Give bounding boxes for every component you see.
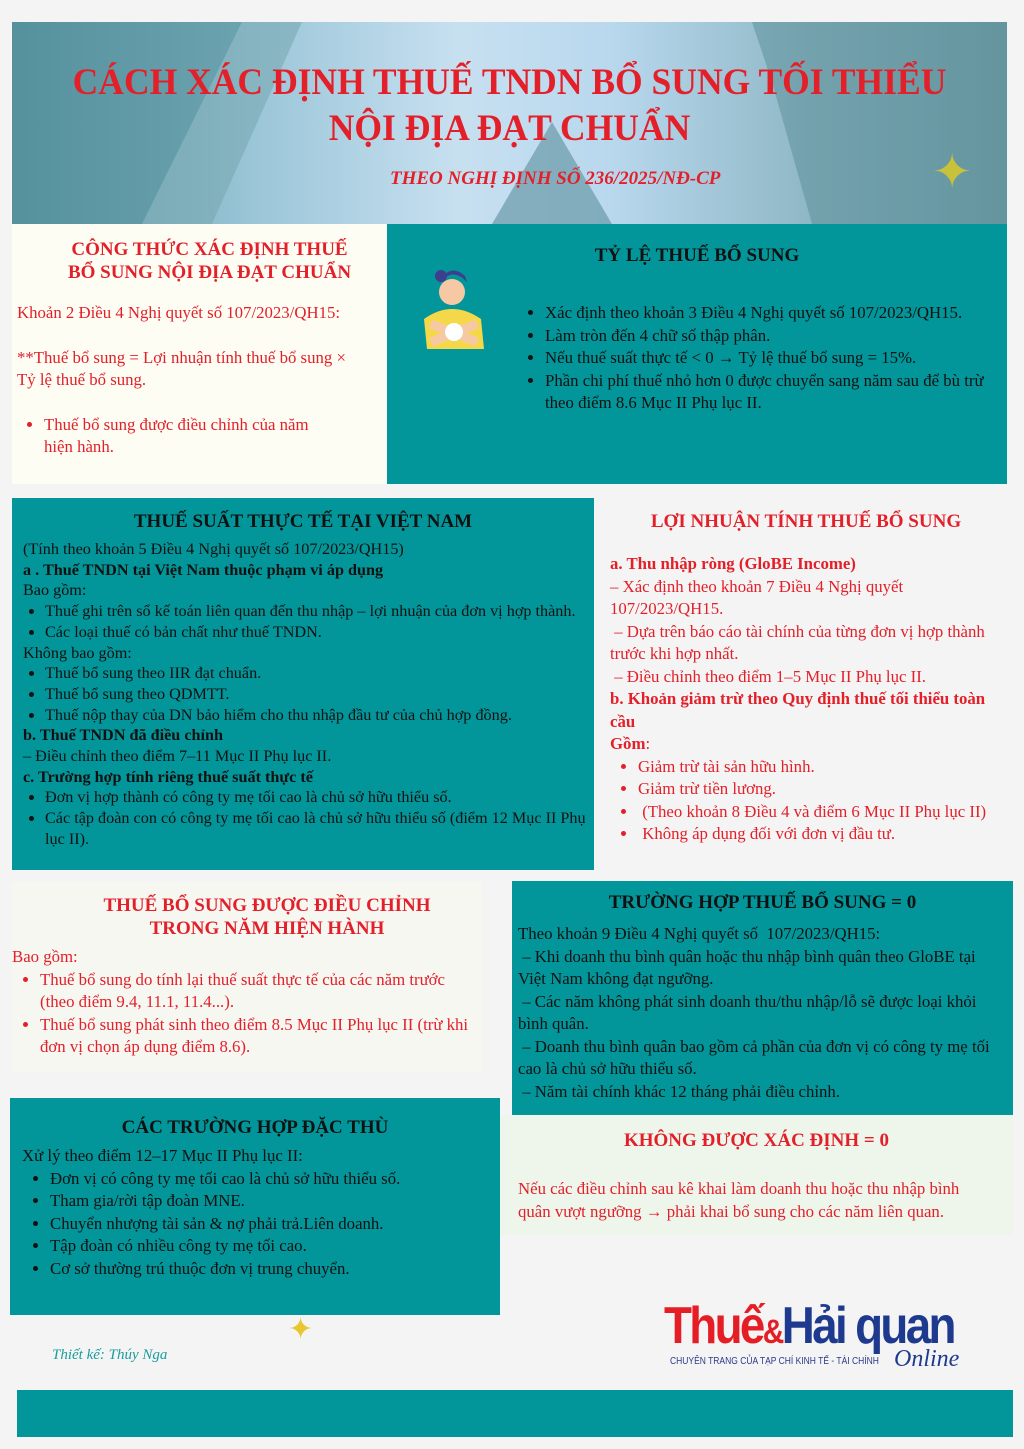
panel: not zero: Nếu các điều chỉnh sau kê khai làm doanh thu hoặc thu nhập bình quân vượt ngưỡng → phải khai bổ sung cho các năm liên quan.	[518, 1179, 959, 1220]
panel: adjusted tax: THUẾ BỔ SUNG ĐƯỢC ĐIỀU CHỈNH	[103, 895, 431, 916]
panel: profit: b. Khoản giảm trừ theo Quy định thuế tối thiểu toàn cầu	[610, 689, 985, 730]
panel: profit: (Theo khoản 8 Điều 4 và điểm 6 Mục II Phụ lục II)	[642, 802, 986, 820]
panel: adjusted tax	[12, 882, 482, 1072]
header banner	[12, 22, 1007, 224]
panel: effective rate: Đơn vị hợp thành có công ty mẹ tối cao là chủ sở hữu thiểu số.	[45, 788, 452, 806]
title: NỘI ĐỊA ĐẠT CHUẨN	[329, 108, 690, 149]
panel: zero case	[512, 881, 1013, 1115]
panel: not zero	[500, 1115, 1013, 1235]
panel: zero case: – Các năm không phát sinh doanh thu/thu nhập/lỗ sẽ được loại khỏi bình quân.	[518, 992, 976, 1033]
panel: profit: – Xác định theo khoản 7 Điều 4 Nghị quyết 107/2023/QH15.	[610, 576, 903, 618]
panel: effective rate: Các loại thuế có bản chất như thuế TNDN.	[45, 623, 322, 641]
panel: formula	[12, 224, 387, 484]
logo: CHUYÊN TRANG CỦA TẠP CHÍ KINH TẾ - TÀI CHÍNH	[670, 1356, 879, 1367]
panel: special cases: Xử lý theo điểm 12–17 Mục II Phụ lục II:	[22, 1146, 303, 1165]
panel: special cases	[10, 1098, 500, 1315]
panel: tax rate	[387, 224, 1007, 484]
icon: person	[424, 270, 484, 349]
panel: formula: **Thuế bổ sung = Lợi nhuận tính thuế bổ sung × Tỷ lệ thuế bổ sung.	[17, 348, 346, 389]
panel: adjusted tax: TRONG NĂM HIỆN HÀNH	[150, 918, 384, 939]
panel: tax rate: Làm tròn đến 4 chữ số thập phân.	[545, 326, 770, 344]
title	[73, 60, 946, 149]
panel: profit: Gồm:	[610, 734, 650, 753]
panel: effective rate: Bao gồm:	[23, 581, 86, 599]
panel: profit	[610, 510, 986, 843]
panel: special cases: Tham gia/rời tập đoàn MNE.	[50, 1191, 245, 1210]
panel: profit: Không áp dụng đối với đơn vị đầu tư.	[642, 824, 895, 843]
panel: effective rate: THUẾ SUẤT THỰC TẾ TẠI VIỆT NAM	[134, 511, 472, 532]
panel: special cases: CÁC TRƯỜNG HỢP ĐẶC THÙ	[122, 1117, 388, 1138]
panel: effective rate: – Điều chỉnh theo điểm 7–11 Mục II Phụ lục II.	[23, 747, 331, 765]
panel: tax rate: TỶ LỆ THUẾ BỔ SUNG	[595, 245, 799, 266]
panel: effective rate: c. Trường hợp tính riêng thuế suất thực tế	[23, 768, 313, 786]
panel: profit: LỢI NHUẬN TÍNH THUẾ BỔ SUNG	[651, 511, 961, 532]
panel: profit: a. Thu nhập ròng (GloBE Income)	[610, 554, 856, 573]
panel: tax rate: Xác định theo khoản 3 Điều 4 Nghị quyết số 107/2023/QH15.	[545, 303, 962, 322]
logo: Online	[894, 1346, 959, 1372]
panel: special cases: Đơn vị có công ty mẹ tối cao là chủ sở hữu thiểu số.	[50, 1168, 400, 1188]
panel: effective rate: Thuế nộp thay của DN bảo hiểm cho thu nhập đầu tư của chủ hợp đồng.	[45, 706, 512, 724]
panel: formula: Thuế bổ sung được điều chỉnh của năm hiện hành.	[44, 414, 308, 456]
panel: special cases: Chuyển nhượng tài sản & nợ phải trả.Liên doanh.	[50, 1214, 384, 1232]
icon: sparkle: ✦	[932, 146, 972, 199]
subtitle: THEO NGHỊ ĐỊNH SỐ 236/2025/NĐ-CP	[390, 168, 720, 189]
panel: effective rate	[12, 498, 594, 870]
panel: tax rate: Phần chi phí thuế nhỏ hơn 0 được chuyển sang năm sau để bù trừ theo điểm 8.6 Mục II Phụ lục II.	[545, 370, 984, 412]
panel: profit: – Dựa trên báo cáo tài chính của từng đơn vị hợp thành trước khi hợp nhất.	[610, 622, 985, 663]
panel: zero case: – Khi doanh thu bình quân hoặc thu nhập bình quân theo GloBE tại Việt Nam không đạt ngưỡng.	[518, 946, 976, 988]
panel: effective rate: Thuế ghi trên sổ kế toán liên quan đến thu nhập – lợi nhuận của đơn vị hợp thành.	[45, 602, 576, 620]
panel: special cases: Tập đoàn có nhiều công ty mẹ tối cao.	[50, 1236, 307, 1255]
panel: not zero: KHÔNG ĐƯỢC XÁC ĐỊNH = 0	[624, 1130, 889, 1151]
panel: zero case: TRƯỜNG HỢP THUẾ BỔ SUNG = 0	[609, 892, 916, 913]
panel: effective rate: Không bao gồm:	[23, 644, 132, 662]
panel: zero case: – Năm tài chính khác 12 tháng phải điều chỉnh.	[522, 1082, 840, 1100]
panel: tax rate: Nếu thuế suất thực tế < 0 → Tỷ lệ thuế bổ sung = 15%.	[545, 348, 916, 367]
panel: effective rate: Thuế bổ sung theo QDMTT.	[45, 685, 229, 703]
logo: Thuế&Hải quan	[664, 1297, 954, 1355]
panel: effective rate: b. Thuế TNDN đã điều chỉnh	[23, 726, 223, 744]
title: CÁCH XÁC ĐỊNH THUẾ TNDN BỔ SUNG TỐI THIỂU	[73, 62, 946, 103]
panel: profit: Giảm trừ tiền lương.	[638, 779, 776, 798]
panel: effective rate: a . Thuế TNDN tại Việt Nam thuộc phạm vi áp dụng	[23, 561, 383, 579]
panel: adjusted tax: Thuế bổ sung phát sinh theo điểm 8.5 Mục II Phụ lục II (trừ khi đơn vị chọn áp dụng điểm 8.6).	[40, 1014, 468, 1056]
panel: profit: Giảm trừ tài sản hữu hình.	[638, 756, 815, 776]
footer bar	[17, 1390, 1013, 1437]
panel: formula: CÔNG THỨC XÁC ĐỊNH THUẾ	[71, 239, 348, 260]
panel: zero case: – Doanh thu bình quân bao gồm cả phần của đơn vị có công ty mẹ tối cao là chủ sở hữu thiểu số.	[518, 1036, 990, 1078]
panel: zero case: Theo khoản 9 Điều 4 Nghị quyết số 107/2023/QH15:	[518, 924, 880, 943]
panel: effective rate: Thuế bổ sung theo IIR đạt chuẩn.	[45, 664, 261, 682]
panel: special cases: Cơ sở thường trú thuộc đơn vị trung chuyển.	[50, 1258, 350, 1278]
panel: effective rate: (Tính theo khoản 5 Điều 4 Nghị quyết số 107/2023/QH15)	[23, 540, 404, 558]
panel: adjusted tax: Thuế bổ sung do tính lại thuế suất thực tế của các năm trước (theo điểm 9.4, 11.1, 11.4...).	[40, 970, 445, 1011]
panel: adjusted tax: Bao gồm:	[12, 947, 78, 966]
panel: formula: BỔ SUNG NỘI ĐỊA ĐẠT CHUẨN	[68, 262, 351, 283]
panel: formula: Khoản 2 Điều 4 Nghị quyết số 107/2023/QH15:	[17, 303, 340, 322]
panel: profit: – Điều chỉnh theo điểm 1–5 Mục II Phụ lục II.	[614, 666, 926, 686]
icon: sparkle small: ✦	[288, 1313, 313, 1346]
panel: effective rate: Các tập đoàn con có công ty mẹ tối cao là chủ sở hữu thiểu số (điểm 12 Mục II Phụ lục II).	[45, 809, 586, 848]
credit: Thiết kế: Thúy Nga	[52, 1347, 167, 1363]
